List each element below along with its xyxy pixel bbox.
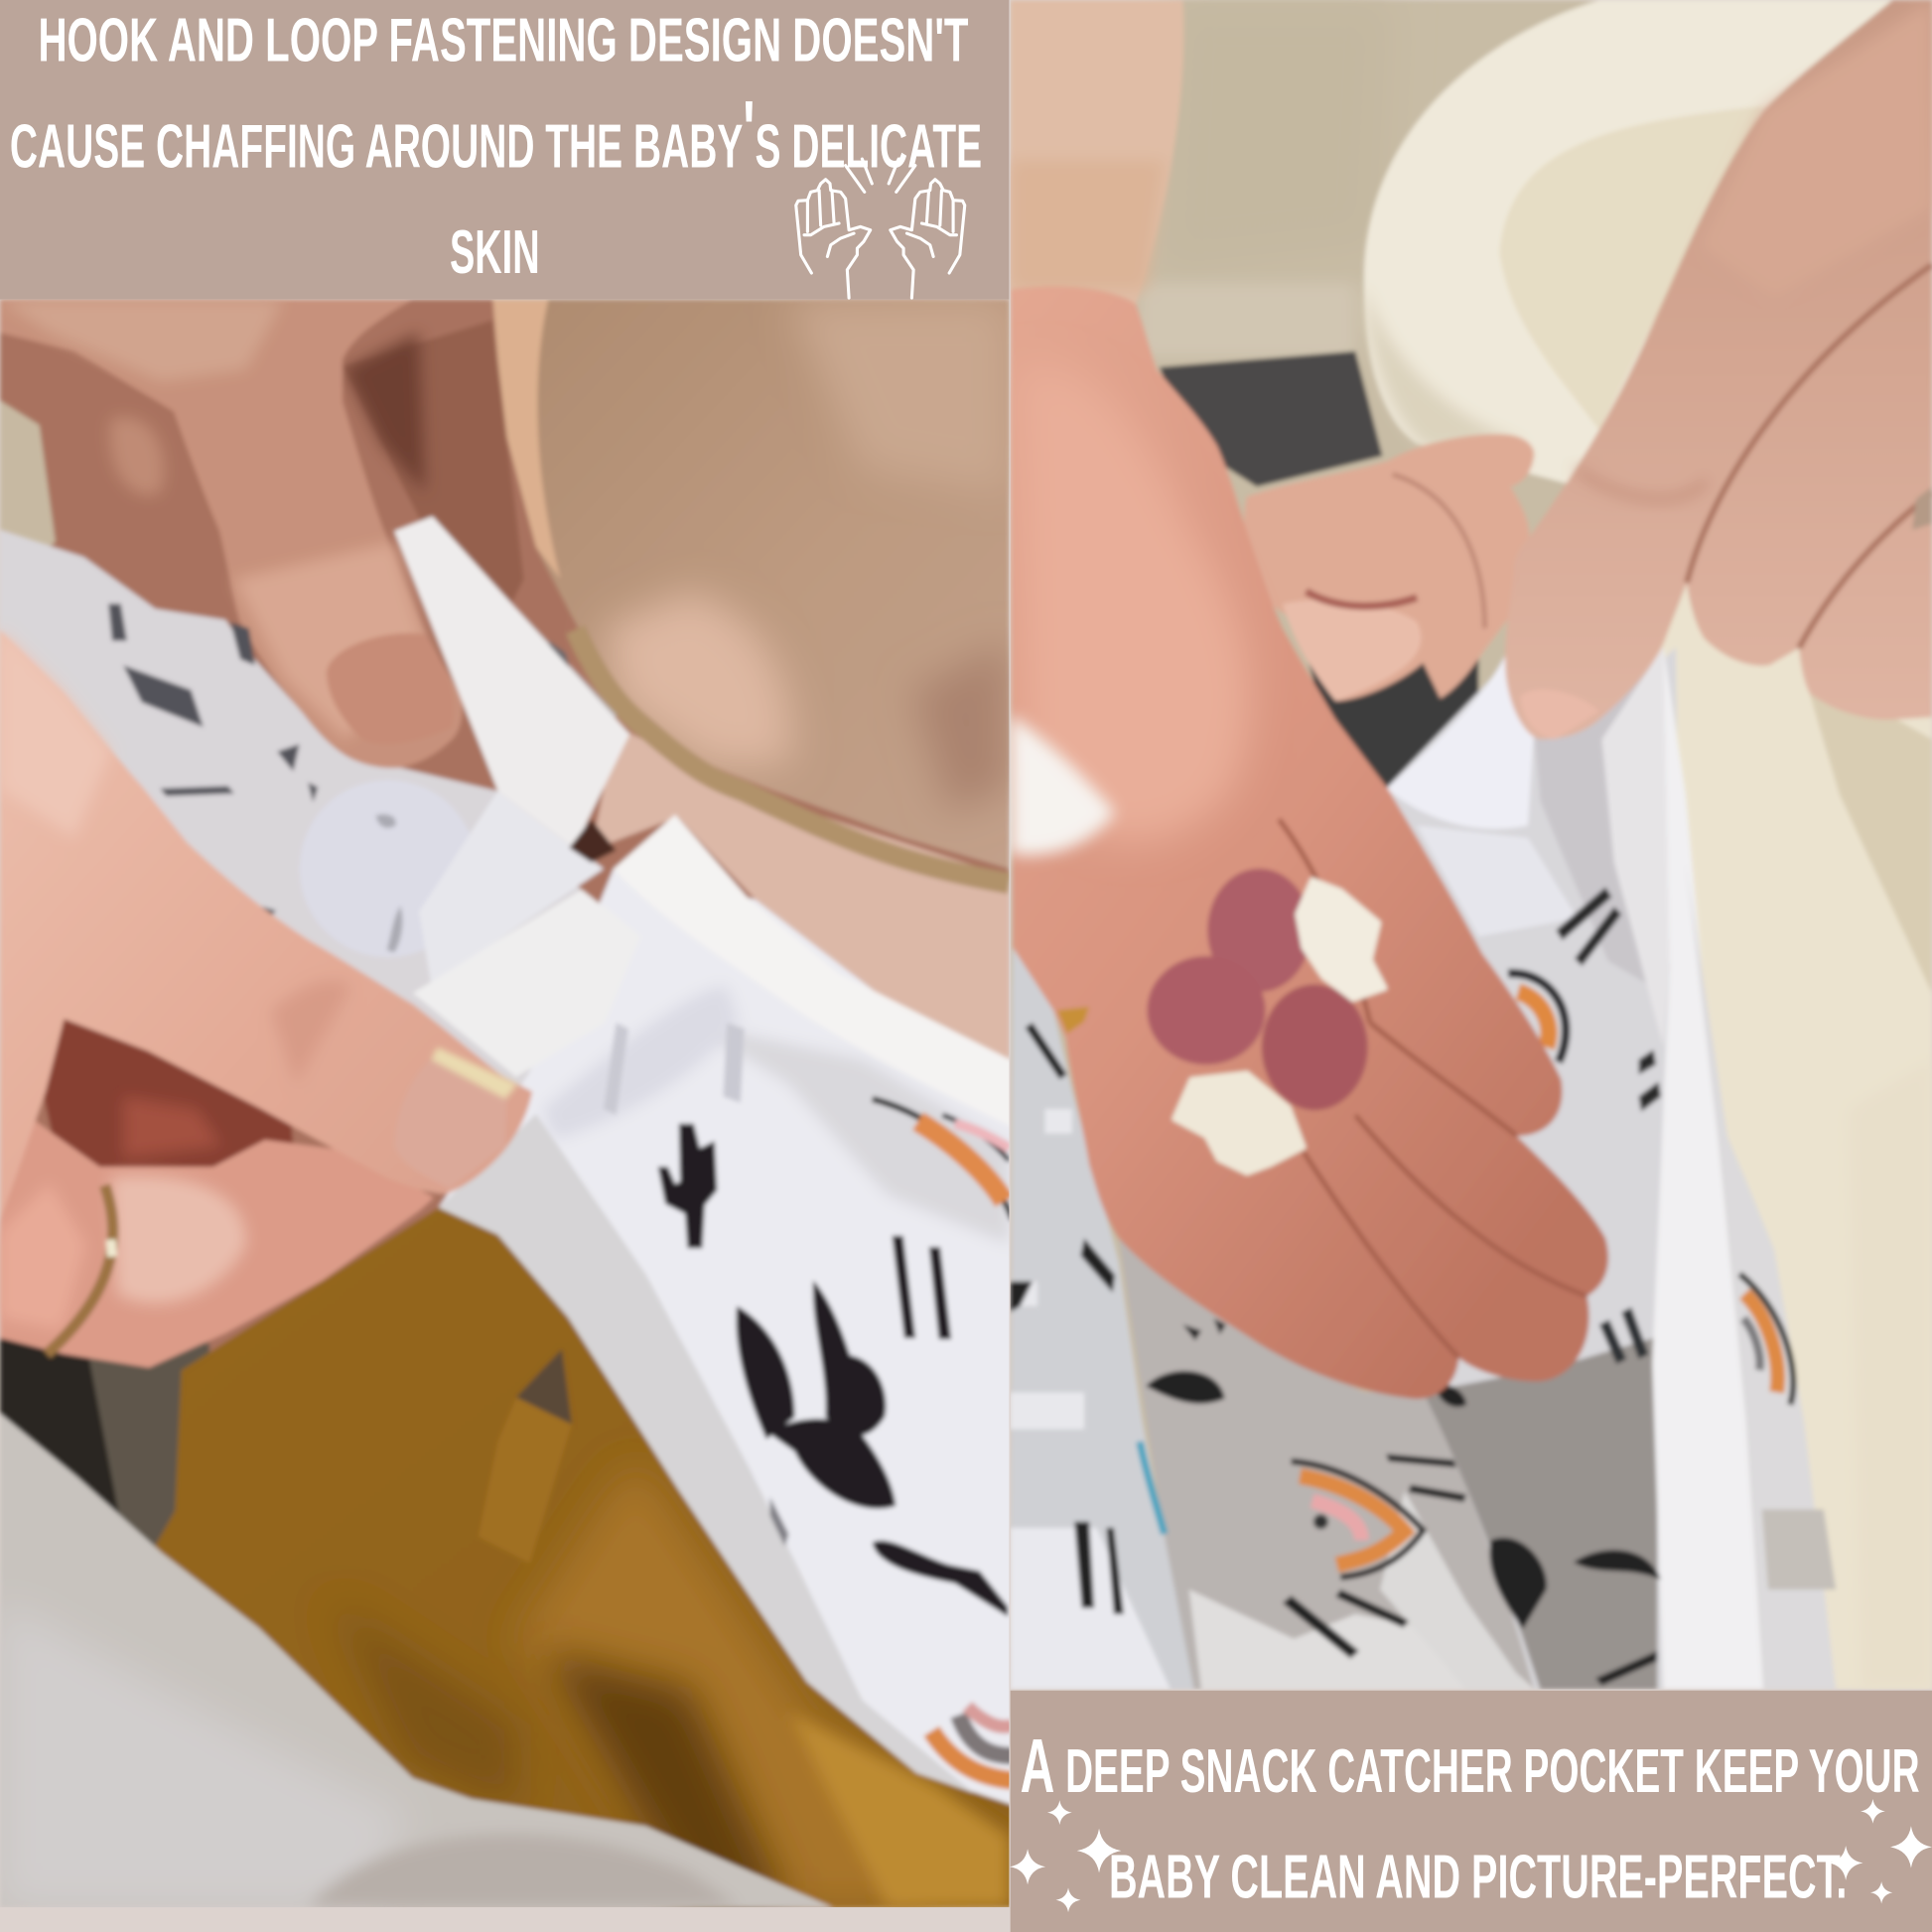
fingernail bbox=[1520, 689, 1599, 740]
arm of palm hand bbox=[1011, 0, 1183, 305]
print: black dashes bbox=[1556, 888, 1661, 1111]
thumb of front hand bbox=[0, 629, 532, 1221]
print marks on fabric bbox=[1011, 1023, 1661, 1686]
rainbow print, left fold bbox=[1140, 1442, 1165, 1534]
baby's hand bbox=[1244, 434, 1534, 701]
heading line 2: S DELICATE bbox=[756, 112, 982, 181]
thumbnail of front hand bbox=[394, 1053, 507, 1189]
banner: hook and loop heading bbox=[0, 0, 1009, 300]
mustard high chair seat bbox=[123, 1207, 1013, 1907]
dark table edge bbox=[1160, 351, 1382, 486]
hand holding the pocket open bbox=[1505, 0, 1932, 740]
cream tray rim bbox=[1364, 0, 1932, 1690]
grey lining behind the hand bbox=[1386, 647, 1688, 1690]
white puff, bottom bbox=[1174, 1073, 1304, 1173]
lower right dark fabric bbox=[1423, 1337, 1657, 1690]
dark gap beside neck bbox=[569, 819, 617, 863]
garment collar bbox=[614, 814, 1013, 1128]
blurred white object at palm edge bbox=[1011, 715, 1115, 855]
tray lower right bbox=[1601, 469, 1932, 1690]
rainbow print, lower bbox=[931, 1707, 1013, 1780]
heading line 2: CAUSE CHAFFING AROUND THE BABY bbox=[10, 112, 1178, 181]
garment inner seam band bbox=[439, 1114, 973, 1793]
lower finger of front hand bbox=[0, 1119, 434, 1368]
heading line 1: HOOK AND LOOP FASTENING DESIGN DOESN'T bbox=[38, 7, 969, 75]
pocket right fabric bbox=[1686, 863, 1836, 1690]
thumbnail bbox=[326, 631, 437, 734]
ring bbox=[1912, 486, 1932, 530]
heading line 2: ' bbox=[743, 84, 756, 175]
icon: raised open hands bbox=[796, 159, 965, 298]
rainbow print, fabric centre bbox=[1140, 973, 1793, 1578]
fingers behind the thumb bbox=[476, 300, 496, 344]
lower fabric bbox=[1119, 1238, 1534, 1690]
seat strap slot bbox=[479, 1398, 570, 1562]
grey sleeve foreground bbox=[0, 1414, 833, 1907]
garment body bbox=[439, 869, 1013, 1805]
icon: sparkles bbox=[1010, 1799, 1932, 1912]
banner: snack catcher pocket caption bbox=[1010, 1691, 1932, 1932]
dark gap between fingers of front hand bbox=[25, 1011, 296, 1232]
snacks in palm bbox=[1147, 869, 1385, 1173]
rainbow print, pocket upper bbox=[1508, 973, 1566, 1062]
blurred background, far left bbox=[0, 399, 58, 548]
cactus prints bbox=[658, 1124, 1008, 1616]
panel: left photo, fastening at baby's neck bbox=[0, 300, 1013, 1907]
thumb of upper hand bbox=[0, 300, 463, 767]
white puff, top bbox=[1298, 880, 1385, 1000]
gold crumb bbox=[1057, 1007, 1089, 1034]
rainbow print, upper bbox=[873, 1099, 1013, 1220]
left fabric fold bbox=[1011, 947, 1194, 1690]
gold ring bbox=[47, 1185, 113, 1354]
palm of hand bbox=[1011, 286, 1608, 1399]
panel: right photo, snack catcher pocket bbox=[1011, 0, 1932, 1690]
pink snack, top bbox=[1207, 869, 1311, 992]
dark gap under baby's hand bbox=[1307, 653, 1478, 838]
felt loop patch bbox=[300, 780, 477, 957]
finger creases bbox=[1279, 819, 1587, 1358]
pink snack, left bbox=[1147, 956, 1266, 1064]
white pocket edge bbox=[1652, 647, 1763, 1690]
rainbow print, pocket lower bbox=[1739, 1274, 1793, 1405]
baby's head bbox=[536, 300, 1009, 870]
baby's lower neck bbox=[592, 727, 1009, 1059]
inner basin of tray bbox=[1499, 106, 1763, 430]
patterned fabric upper left bbox=[0, 528, 583, 1088]
white strap tab bbox=[394, 516, 629, 848]
white tab, velcro end bbox=[414, 888, 602, 1076]
heading line 3: SKIN bbox=[450, 218, 540, 287]
tan elastic headband bbox=[576, 629, 1009, 884]
bottom-left pale strip bbox=[0, 1907, 1011, 1932]
pink snack, right bbox=[1262, 985, 1368, 1110]
